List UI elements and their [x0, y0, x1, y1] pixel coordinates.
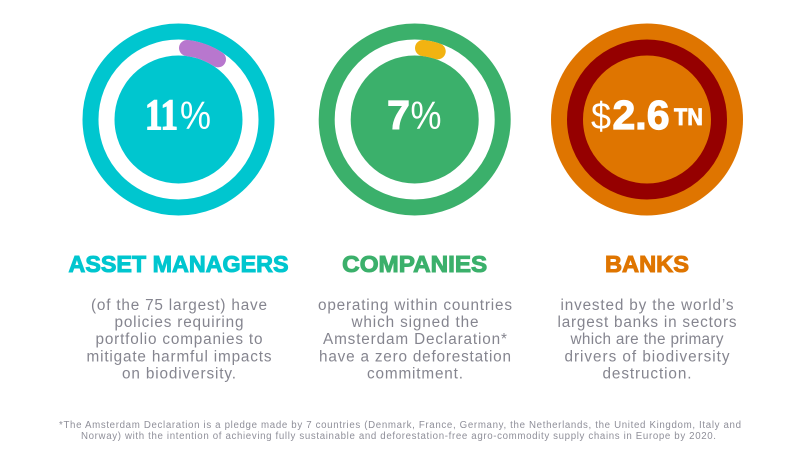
description: asset managers: (of the 75 largest) have	[91, 297, 267, 314]
panel: asset managers	[68, 32, 288, 382]
value: $2.6tn: TN	[674, 104, 703, 131]
value: $2.6tn	[591, 92, 703, 138]
value: $2.6tn: $	[591, 96, 611, 138]
panel: banks	[551, 24, 743, 382]
value: 11%	[145, 92, 211, 139]
heading: banks: BANKS	[605, 251, 689, 277]
description: companies: commitment.	[367, 365, 463, 382]
description: banks: largest banks in sectors	[558, 314, 737, 331]
description: asset managers: portfolio companies to	[96, 331, 262, 348]
heading: companies: COMPANIES	[342, 251, 487, 277]
description: banks: which are the primary	[570, 331, 724, 348]
description: companies: have a zero deforestation	[319, 348, 511, 365]
description: asset managers: mitigate harmful impacts	[86, 348, 272, 365]
description: banks: invested by the world’s	[560, 297, 734, 314]
panel: companies	[318, 32, 512, 382]
donut: 7%	[327, 32, 503, 208]
footnote: Norway) with the intention of achieving fully sustainable and deforestation-free agro-commodity supply chains in Europe by 2020.	[81, 431, 716, 442]
description: banks: drivers of biodiversity	[564, 348, 730, 365]
donut: 11%	[90, 32, 266, 208]
heading: asset managers: ASSET MANAGERS	[68, 251, 288, 277]
value: $2.6tn: 2.6	[612, 92, 670, 138]
description: companies: operating within countries	[318, 297, 512, 314]
donut: $2.6tn	[551, 24, 743, 216]
value: 11%: %	[180, 95, 211, 138]
value: 7%: 7	[387, 92, 410, 138]
description: asset managers: on biodiversity.	[122, 365, 236, 382]
value: 7%	[387, 92, 442, 138]
value: 7%: %	[410, 95, 442, 138]
description: banks: destruction.	[602, 365, 692, 382]
description: asset managers: policies requiring	[114, 314, 244, 331]
description: companies: Amsterdam Declaration*	[323, 331, 507, 348]
value: 11%: 11	[145, 92, 178, 139]
footnote: *The Amsterdam Declaration is a pledge made by 7 countries (Denmark, France, Germany, the Netherlands, the United Kingdom, Italy and	[59, 420, 741, 431]
description: companies: which signed the	[350, 314, 478, 331]
